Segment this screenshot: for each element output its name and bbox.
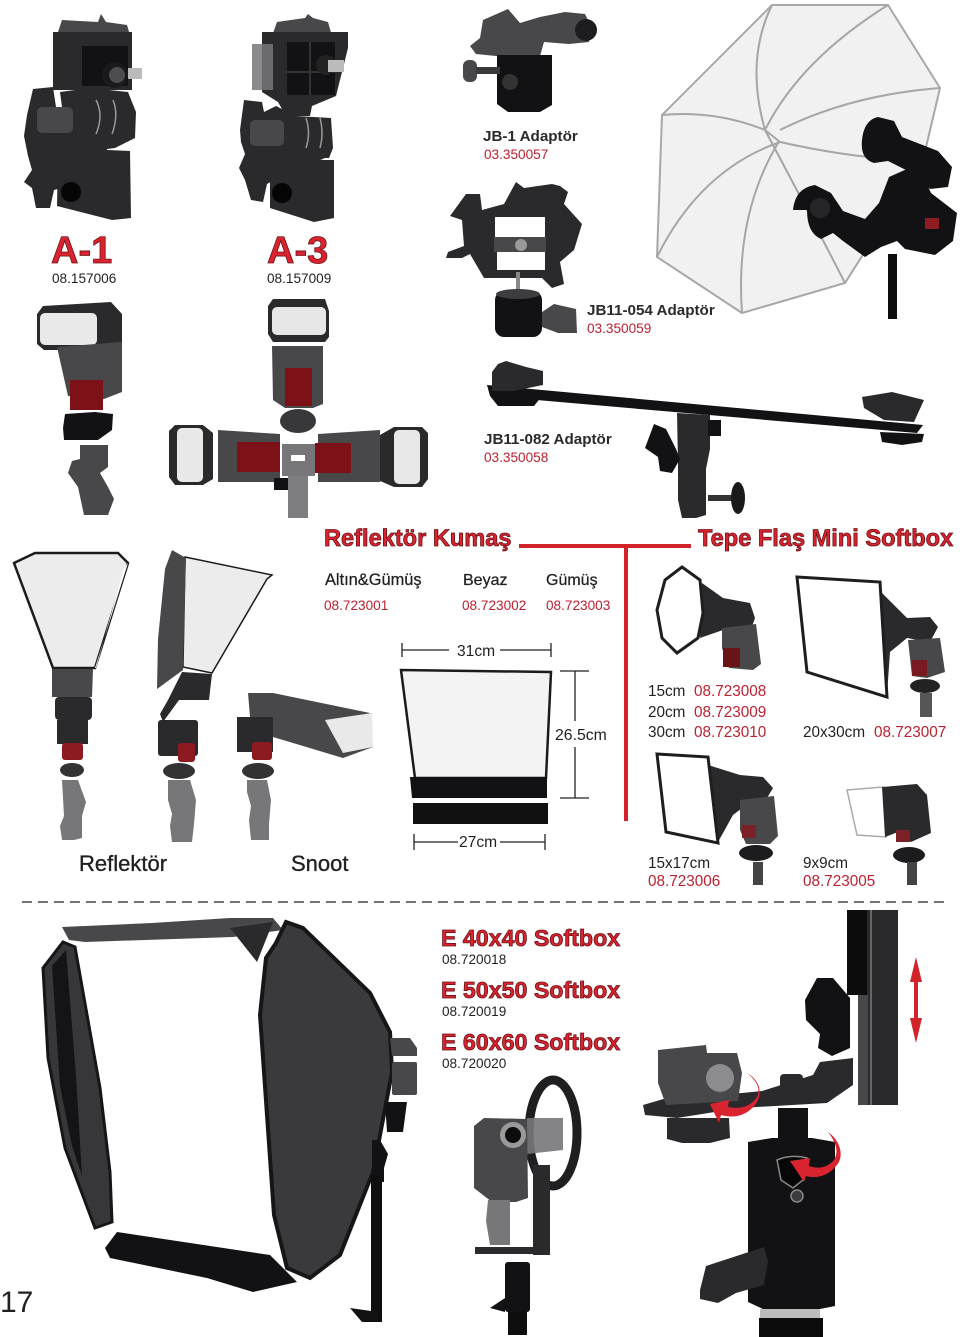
photo: flash on A-1 adapter bbox=[37, 302, 122, 515]
dashed divider bbox=[22, 901, 946, 903]
small softbox labels bbox=[648, 855, 875, 890]
mini softbox size codes bbox=[648, 683, 946, 741]
photo: umbrella with flashes bbox=[657, 5, 957, 319]
photo: 15x17 softbox bbox=[657, 754, 778, 885]
dimension: 27cm bbox=[414, 834, 545, 851]
softbox titles and codes: 08.720019 bbox=[442, 1004, 506, 1019]
small softbox labels: 9x9cm bbox=[803, 855, 848, 872]
photo: JB11-054 adapter bbox=[446, 182, 582, 337]
label: A-3: 08.157009 bbox=[267, 271, 331, 286]
photo: bracket with ball head bbox=[643, 910, 898, 1337]
icon: rotate arrow on shoe bbox=[710, 1073, 760, 1123]
softbox titles and codes: E 60x60 Softbox bbox=[441, 1029, 620, 1055]
label: A-1: A-1 bbox=[51, 230, 112, 272]
dimension: 26.5cm bbox=[555, 671, 607, 798]
icon: rotate arrow on ball head bbox=[790, 1132, 841, 1182]
fabric labels: Beyaz bbox=[463, 572, 507, 589]
mini softbox size codes: 20cm bbox=[648, 704, 685, 721]
softbox titles and codes: 08.720020 bbox=[442, 1056, 507, 1071]
photo: reflector 2 bbox=[157, 550, 272, 842]
mini softbox size codes: 30cm bbox=[648, 724, 685, 741]
heading: Tepe Flaş Mini Softbox: Tepe Flaş Mini Softbox bbox=[698, 526, 953, 552]
photo: three flashes on JB11 adapter bbox=[169, 299, 428, 518]
fabric labels: Altın&Gümüş bbox=[325, 571, 422, 589]
photo: speedring with flash bbox=[474, 1080, 577, 1335]
dimension: 27cm: 27cm bbox=[459, 834, 497, 851]
small softbox labels: 15x17cm bbox=[648, 855, 710, 872]
photo: large softbox bbox=[43, 918, 417, 1322]
photo: 9x9 softbox bbox=[847, 784, 931, 885]
mini softbox size codes: 08.723007 bbox=[874, 724, 946, 741]
softbox titles and codes: 08.720018 bbox=[442, 952, 506, 967]
fabric labels: 08.723002 bbox=[462, 598, 526, 613]
photo: A-1 adapter bbox=[24, 14, 142, 220]
label: A-3: A-3 bbox=[267, 230, 328, 272]
fabric labels: Gümüş bbox=[546, 572, 598, 589]
label: A-1: 08.157006 bbox=[52, 271, 116, 286]
photo: JB11-082 bar bbox=[487, 361, 924, 518]
photo: square mini softbox bbox=[797, 577, 945, 717]
label: Snoot: Snoot bbox=[291, 851, 348, 876]
label: JB-1 bbox=[483, 128, 578, 162]
label: JB11-054: JB11-054 Adaptör bbox=[587, 302, 715, 319]
softbox titles and codes: E 50x50 Softbox bbox=[441, 977, 620, 1003]
fabric labels bbox=[324, 571, 610, 613]
photo: reflector 1 bbox=[14, 553, 128, 840]
mini softbox size codes: 15cm bbox=[648, 683, 685, 700]
softbox titles and codes bbox=[441, 925, 620, 1071]
section divider lines bbox=[519, 544, 691, 821]
mini softbox size codes: 20x30cm bbox=[803, 724, 865, 741]
heading: Reflektör Kumaş: Reflektör Kumaş bbox=[324, 526, 512, 552]
fabric labels: 08.723001 bbox=[324, 598, 388, 613]
label: JB11-082: JB11-082 Adaptör bbox=[484, 431, 612, 448]
page number: 17 bbox=[0, 1286, 33, 1319]
photo: snoot bbox=[237, 693, 373, 840]
photo: reflector fabric bbox=[401, 670, 551, 824]
dimension: 31cm bbox=[402, 643, 551, 660]
photo: JB-1 adapter bbox=[463, 9, 597, 112]
icon: vertical double arrow bbox=[910, 957, 922, 1043]
mini softbox size codes: 08.723010 bbox=[694, 724, 766, 741]
label: JB11-082: 03.350058 bbox=[484, 450, 548, 465]
dimension: 31cm: 31cm bbox=[457, 643, 495, 660]
label: Reflektör: Reflektör bbox=[79, 851, 167, 876]
small softbox labels: 08.723005 bbox=[803, 873, 875, 890]
small softbox labels: 08.723006 bbox=[648, 873, 720, 890]
softbox titles and codes: E 40x40 Softbox bbox=[441, 925, 620, 951]
dimension: 26.5cm: 26.5cm bbox=[555, 727, 607, 744]
label: JB11-054: 03.350059 bbox=[587, 321, 651, 336]
photo: A-3 adapter bbox=[239, 14, 348, 222]
mini softbox size codes: 08.723009 bbox=[694, 704, 766, 721]
photo: octagonal mini softbox bbox=[657, 567, 761, 670]
fabric labels: 08.723003 bbox=[546, 598, 610, 613]
label: JB-1: 03.350057 bbox=[484, 147, 548, 162]
label: JB11-054 bbox=[587, 302, 715, 336]
label: JB-1: JB-1 Adaptör bbox=[483, 128, 578, 145]
label: JB11-082 bbox=[484, 431, 612, 465]
mini softbox size codes: 08.723008 bbox=[694, 683, 766, 700]
